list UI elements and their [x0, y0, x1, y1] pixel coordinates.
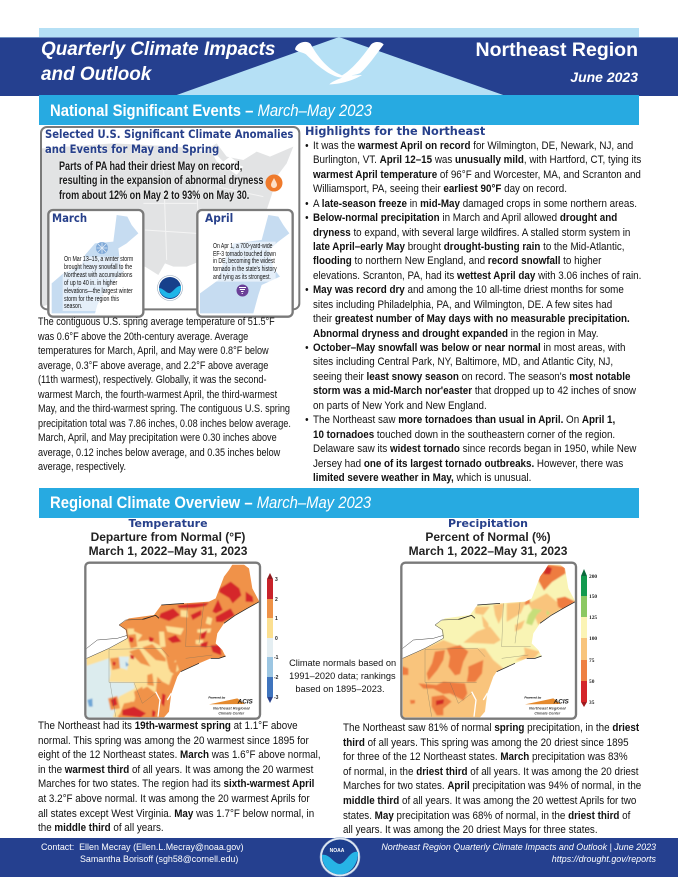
text: temperature summary paragraph: all states except West Virginia. May was 1.7°F below normal, in — [38, 808, 314, 820]
section banner: National Significant Events: National Significant Events – March–May 2023 — [50, 102, 372, 120]
map: temperature departure from normal: Climate Center — [218, 711, 245, 715]
legend: precipitation color bar: 100 — [589, 636, 597, 642]
heading: Departure from Normal: Departure from Normal (°F) — [91, 530, 245, 544]
icon: white bird logo — [295, 42, 384, 84]
bullet: record dry May: sites including Philadelphia, PA, and Wilmington, DE. A few sites had — [313, 299, 612, 311]
bullet: tornadoes: 10 tornadoes touched down in the southeastern corner of the region. — [313, 429, 615, 441]
legend: temperature color bar: -3 — [274, 695, 279, 701]
text: temperature summary paragraph: Marches for two states. The region had its sixth-warmest April — [38, 778, 314, 790]
bullet: below-normal precipitation: dryness to expand, with several large wildfires. A stalled storm system in — [313, 227, 630, 239]
text: national summary paragraph: was 0.6°F above the 20th-century average. Average — [38, 330, 248, 342]
section banner: Regional Climate Overview: Regional Climate Overview – March–May 2023 — [50, 494, 371, 512]
text: national summary paragraph: average, 0.3°F above average, and 2.2°F above average — [38, 360, 268, 372]
text: national summary paragraph: (11th warmest), respectively. Globally, it was the second- — [38, 374, 267, 386]
bullet: snowfall: storm was a mid-March nor'easter that dropped up to 42 inches of snow — [313, 385, 636, 397]
bullet: snowfall — [313, 341, 636, 413]
callout: Pennsylvania driest May: from about 12% on May 2 to 93% on May 30. — [59, 190, 249, 202]
text: precipitation summary paragraph: Marches for two states. April precipitation was 94% of normal, in the — [343, 780, 641, 792]
panel: March map inset — [47, 208, 144, 318]
text: national summary paragraph: precipitation total was 7.86 inches, 0.08 inches below average. — [38, 418, 291, 430]
text: precipitation summary paragraph: all years. It was among the 20 driest Mays for three states. — [343, 824, 598, 836]
text: April tornado note: tornado in the state's history — [213, 266, 277, 273]
legend: temperature color bar: 0 — [275, 636, 278, 642]
legend: precipitation color bar: 150 — [589, 594, 597, 600]
map: precipitation percent of normal — [400, 562, 578, 720]
icon: NOAA logo footer — [320, 837, 360, 877]
text: national summary paragraph: March, April, and May precipitation were 0.30 inches above — [38, 432, 277, 444]
text: temperature summary paragraph: in the warmest third of all years. It was among the 20 warmest — [38, 764, 313, 776]
text: precipitation summary paragraph: states. May precipitation was 68% of normal, in the driest third of — [343, 810, 630, 822]
bullet: below-normal precipitation: late April–early May brought drought-busting rain to the Mid-Atlantic, — [313, 241, 625, 253]
text: national summary paragraph: The contiguous U.S. spring average temperature of 51.5°F — [38, 316, 275, 328]
bullet: below-normal precipitation: elevations. Scranton, PA, had its wettest April day with 3.06 inches of rain. — [313, 270, 641, 282]
bullet: warmest April: warmest April temperature of 96°F and Worcester, MA, and Scranton and — [313, 169, 641, 181]
text: April tornado note: On Apr 1, a 700-yard-wide — [213, 243, 273, 250]
map: precipitation percent of normal: ACIS — [553, 698, 570, 705]
footer: dark blue bar — [0, 838, 678, 877]
map: precipitation percent of normal: Climate Center — [534, 711, 561, 715]
panel: selected U.S. significant climate anomalies map — [40, 126, 300, 310]
text: national summary paragraph: May, and the third-warmest spring. The contiguous U.S. spring — [38, 403, 290, 415]
bullet: tornadoes: Delaware saw its widest tornado since records began in 1950, while New — [313, 443, 636, 455]
legend: precipitation color bar — [581, 569, 597, 707]
legend: temperature color bar — [267, 573, 279, 703]
text: April tornado note — [213, 243, 277, 281]
text: temperature summary paragraph: eight of the 12 Northeast states. March was 1.6°F above normal, — [38, 749, 321, 761]
legend: precipitation color bar: 75 — [589, 658, 595, 664]
note: climate normals: Climate normals based on — [289, 658, 396, 669]
text: highlights bullet list — [306, 140, 641, 484]
bullet: warmest April — [313, 139, 641, 197]
bullet: below-normal precipitation: flooding to northern New England, and record snowfall to higher — [313, 255, 601, 267]
bullet: warmest April: Burlington, VT. April 12–15 was unusually mild, with Hartford, CT, tying its — [313, 154, 641, 166]
title: Quarterly Climate Impacts and Outlook: and Outlook — [41, 62, 151, 84]
heading: Temperature: Temperature — [128, 517, 208, 530]
text: precipitation summary paragraph: of normal, in the driest third of all years. It was among the 20 driest — [343, 766, 639, 778]
legend: precipitation color bar: 200 — [589, 574, 597, 580]
callout: Pennsylvania driest May: Parts of PA had their driest May on record, — [59, 161, 242, 173]
bullet: snowfall: sites including Central Park, NY, Baltimore, MD, and Atlantic City, NJ, — [313, 356, 613, 368]
text: precipitation summary paragraph — [343, 722, 641, 836]
text: March winter storm note: Northeast with accumulations — [64, 272, 132, 279]
header: light blue triangle — [177, 37, 503, 95]
legend: precipitation color bar: 35 — [589, 700, 595, 706]
map: precipitation percent of normal: Northeast Regional — [529, 705, 567, 710]
map: temperature departure from normal: Northeast Regional — [213, 705, 251, 710]
text: March winter storm note: elevations—the largest winter — [64, 288, 133, 295]
heading: March: March — [52, 211, 87, 225]
bullet: late-season freeze: A late-season freeze in mid-May damaged crops in some northern areas. — [313, 198, 637, 210]
text: March winter storm note: brought heavy snowfall to the — [64, 264, 132, 271]
text: March winter storm note: On Mar 13–15, a winter storm — [64, 256, 133, 263]
bullet: warmest April: Williamsport, PA, seeing their earliest 90°F day on record. — [313, 183, 567, 195]
text: national summary paragraph: warmest March, the fourth-warmest April, the third-warmest — [38, 388, 277, 400]
bullet: tornadoes: Jersey had one of its largest tornado outbreaks. However, there was — [313, 458, 623, 470]
bullet: record dry May: May was record dry and among the 10 all-time driest months for some — [313, 284, 624, 296]
text: temperature summary paragraph: at 3.2°F above normal. It was among the 20 warmest Aprils for — [38, 793, 310, 805]
footer: publication and URL: https://drought.gov/reports — [552, 854, 656, 864]
section banner: National Significant Events — [39, 95, 639, 125]
text: temperature summary paragraph: normal. This spring was among the 20 warmest since 1895 for — [38, 735, 309, 747]
footer: contact details: Samantha Borisoff (sgh58@cornell.edu) — [80, 853, 238, 864]
text: March winter storm note — [64, 256, 133, 310]
title: Quarterly Climate Impacts and Outlook — [41, 38, 275, 84]
legend: precipitation color bar: 125 — [589, 615, 597, 621]
callout: Pennsylvania driest May: resulting in the expansion of abnormal dryness — [59, 175, 263, 187]
icon: tornado — [236, 284, 248, 296]
heading: Percent of Normal: March 1, 2022–May 31, 2023 — [409, 544, 567, 558]
map: temperature departure from normal — [84, 562, 262, 720]
heading: Selected U.S. Significant Climate Anomalies: Selected U.S. Significant Climate Anomalies — [45, 128, 293, 141]
bullet: record dry May — [313, 283, 630, 341]
text: national summary paragraph — [38, 316, 291, 473]
map: precipitation percent of normal: Powered by — [524, 695, 542, 699]
footer: publication and URL — [381, 842, 656, 864]
bullet: snowfall: on parts of New York and New England. — [313, 400, 487, 412]
section banner: Regional Climate Overview — [39, 488, 639, 518]
text: national summary paragraph: average, respectively. — [38, 461, 126, 473]
legend: temperature color bar: 2 — [275, 597, 278, 603]
heading: June 2023: June 2023 — [570, 69, 638, 85]
text: March winter storm note: season. — [64, 303, 82, 310]
heading: Highlights for the Northeast: Highlights for the Northeast — [305, 125, 485, 138]
text: temperature summary paragraph: The Northeast had its 19th-warmest spring at 1.1°F above — [38, 720, 298, 732]
icon: orange drought drop — [266, 174, 282, 192]
icon: snowflake — [96, 242, 108, 254]
text: March winter storm note: of up to 40 in. in higher — [64, 280, 117, 287]
note: climate normals — [289, 658, 396, 695]
map: temperature departure from normal: Powered by — [208, 695, 226, 699]
heading: Northeast Region: Northeast Region — [475, 39, 638, 61]
heading: Departure from Normal — [89, 530, 247, 558]
text: April tornado note: and tying as its strongest. — [213, 274, 271, 281]
heading: Precipitation: Precipitation — [448, 517, 528, 530]
bullet: record dry May: Abnormal dryness and drought expanded in the region in May. — [313, 328, 598, 340]
header: light blue top band — [39, 28, 639, 38]
text: precipitation summary paragraph: middle third of all years. It was among the 20 wettest Aprils for two — [343, 795, 636, 807]
bullet: tornadoes: limited severe weather in May, which is unusual. — [313, 472, 531, 484]
legend: precipitation color bar: 50 — [589, 679, 595, 685]
legend: temperature color bar: -2 — [274, 675, 279, 681]
heading: Selected U.S. Significant Climate Anomalies — [45, 128, 293, 156]
text: April tornado note: EF-3 tornado touched down — [213, 251, 276, 258]
bullet: warmest April: It was the warmest April on record for Wilmington, DE, Newark, NJ, and — [313, 140, 633, 152]
text: national summary paragraph: temperatures for March, April, and May were 0.8°F below — [38, 345, 269, 357]
bullet: snowfall: seeing their least snowy season on record. The season's most notable — [313, 371, 630, 383]
footer: contact details — [41, 841, 244, 864]
text: March winter storm note: storm for the region this — [64, 296, 119, 303]
heading: Departure from Normal: March 1, 2022–May 31, 2023 — [89, 544, 247, 558]
bullet: below-normal precipitation — [313, 211, 641, 283]
legend: temperature color bar: 3 — [275, 577, 278, 583]
bullet: below-normal precipitation: Below-normal precipitation in March and April allowed drought and — [313, 212, 617, 224]
legend: temperature color bar: -1 — [274, 655, 279, 661]
heading: April: April — [205, 211, 233, 225]
note: climate normals: 1991–2020 data; rankings — [289, 671, 396, 682]
legend: temperature color bar: 1 — [275, 616, 278, 622]
callout: Pennsylvania driest May — [59, 161, 263, 202]
panel: April map inset — [196, 208, 294, 318]
header: dark blue banner — [0, 37, 678, 96]
bullet: tornadoes — [313, 413, 636, 485]
text: April tornado note: in DE, becoming the widest — [213, 258, 275, 265]
text: precipitation summary paragraph: The Northeast saw 81% of normal spring precipitation, in the driest — [343, 722, 639, 734]
text: temperature summary paragraph: the middle third of all years. — [38, 822, 164, 834]
bullet: tornadoes: The Northeast saw more tornadoes than usual in April. On April 1, — [313, 414, 615, 426]
text: temperature summary paragraph — [38, 720, 321, 834]
bullet: snowfall: October–May snowfall was below or near normal in most areas, with — [313, 342, 625, 354]
note: climate normals: based on 1895–2023. — [295, 684, 385, 695]
footer: contact details: Contact: Ellen Mecray (Ellen.L.Mecray@noaa.gov) — [41, 841, 244, 852]
heading: Selected U.S. Significant Climate Anomalies: and Events for May and Spring — [45, 142, 219, 156]
icon: NOAA logo footer: NOAA — [330, 848, 345, 854]
text: precipitation summary paragraph: third of all years. This spring was among the 20 driest since 1895 — [343, 737, 629, 749]
footer: publication and URL: Northeast Region Quarterly Climate Impacts and Outlook | June 2023 — [381, 842, 656, 852]
bullet: record dry May: their greatest number of May days with no measurable precipitation. — [313, 313, 630, 325]
map: temperature departure from normal: ACIS — [237, 698, 254, 705]
heading: Percent of Normal — [409, 530, 567, 558]
title: Quarterly Climate Impacts and Outlook: Quarterly Climate Impacts — [41, 38, 275, 60]
icon: NOAA logo small — [157, 275, 183, 301]
text: precipitation summary paragraph: for three of the 12 Northeast states. March precipitation was 83% — [343, 751, 628, 763]
heading: Percent of Normal: Percent of Normal (%) — [425, 530, 551, 544]
text: national summary paragraph: average, 0.12 inches below average, and 0.35 inches below — [38, 446, 280, 458]
